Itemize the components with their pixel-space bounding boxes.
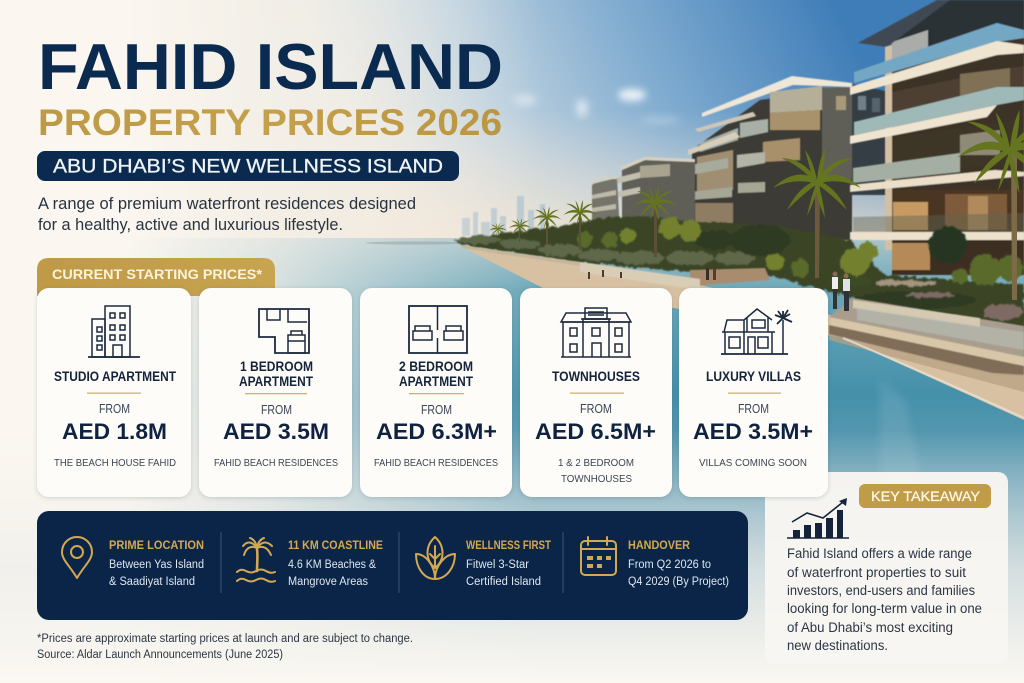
section tab: current starting prices (37, 258, 275, 296)
fact: wellness (466, 540, 551, 588)
icon: 2 bedroom floor plan (409, 306, 467, 353)
card heading (239, 359, 314, 389)
takeaway text: new destinations. (787, 638, 888, 653)
icon: palm and waves (237, 538, 275, 582)
fact: prime location: Between Yas Island (109, 559, 204, 571)
big building (850, 0, 1024, 275)
icon: villa with palm (721, 309, 792, 354)
far buildings (590, 157, 695, 232)
palm trees (489, 110, 1024, 300)
subtitle: PROPERTY PRICES 2026 (38, 102, 502, 143)
fact: coastline: 4.6 KM Beaches & (288, 559, 376, 571)
icon: wellness leaves (416, 537, 455, 579)
fact: handover: From Q2 2026 to (628, 559, 711, 571)
vegetation along promenade (455, 216, 1024, 328)
card: studio apartment (37, 288, 191, 497)
card: 1 bedroom apartment: FROM (261, 403, 292, 417)
badge (859, 484, 991, 508)
icon: 1 bedroom floor plan (259, 309, 309, 353)
card: luxury villas (679, 288, 828, 497)
intro text (38, 195, 416, 234)
footnote: Source: Aldar Launch Announcements (June 2025) (37, 649, 283, 661)
card heading: TOWNHOUSES (552, 369, 640, 384)
card heading (399, 359, 474, 389)
promenade, railing and sea wall (829, 298, 1024, 418)
card: townhouses (520, 288, 672, 497)
plaza and low wall (462, 245, 770, 290)
title: FAHID ISLAND (38, 31, 503, 103)
card: townhouses: FROM (580, 402, 612, 416)
fact: wellness: WELLNESS FIRST (466, 540, 551, 552)
card: studio apartment: THE BEACH HOUSE FAHID (54, 457, 176, 469)
footnote (37, 633, 413, 661)
fact: prime location: & Saadiyat Island (109, 576, 195, 588)
sand beach (460, 246, 1024, 420)
badge: KEY TAKEAWAY (871, 489, 980, 504)
price: AED 3.5M+ (693, 419, 813, 444)
card: 2 bedroom apartment: FROM (421, 403, 452, 417)
card heading: APARTMENT (399, 374, 474, 389)
fact: prime location (109, 540, 204, 588)
takeaway text: of Abu Dhabi’s most exciting (787, 620, 953, 635)
people walking (588, 268, 850, 311)
tagline pill: ABU DHABI’S NEW WELLNESS ISLAND (53, 156, 443, 178)
card: 2 bedroom apartment: FAHID BEACH RESIDENCES (374, 457, 498, 469)
card: 1 bedroom apartment (199, 288, 352, 497)
takeaway text: investors, end-users and families (787, 583, 975, 598)
card heading: LUXURY VILLAS (706, 369, 801, 384)
fact: prime location: PRIME LOCATION (109, 540, 204, 552)
fact: wellness: Certified Island (466, 576, 541, 588)
fact: handover: Q4 2029 (By Project) (628, 576, 729, 588)
intro text: A range of premium waterfront residences designed (38, 195, 416, 213)
card: luxury villas: VILLAS COMING SOON (699, 457, 807, 469)
card heading: APARTMENT (239, 374, 314, 389)
takeaway text: looking for long-term value in one (787, 601, 982, 616)
card: key takeaway (765, 472, 1008, 664)
takeaway text: Fahid Island offers a wide range (787, 546, 972, 561)
intro text: for a healthy, active and luxurious lifestyle. (38, 216, 343, 234)
fact: handover (628, 540, 729, 588)
card heading: 1 BEDROOM (240, 359, 313, 374)
icon: calendar (581, 537, 616, 575)
fact: wellness: Fitwel 3-Star (466, 559, 529, 571)
section tab: current starting prices: CURRENT STARTING PRICES* (52, 267, 263, 282)
icon: apartment building (88, 306, 140, 357)
takeaway text: of waterfront properties to suit (787, 565, 966, 580)
price: AED 3.5M (223, 419, 329, 444)
fact: coastline (288, 540, 383, 588)
fact: coastline: 11 KM COASTLINE (288, 540, 383, 552)
card heading: STUDIO APARTMENT (54, 369, 177, 384)
icon: rising bar chart (787, 498, 849, 538)
price: AED 6.3M+ (376, 419, 497, 444)
card: townhouses: TOWNHOUSES (561, 473, 632, 485)
card heading: 2 BEDROOM (399, 359, 473, 374)
middle building (688, 76, 890, 240)
price: AED 6.5M+ (535, 419, 656, 444)
fact: coastline: Mangrove Areas (288, 576, 368, 588)
card: studio apartment: FROM (99, 402, 130, 416)
icon: townhouse (561, 308, 631, 357)
card: townhouses: 1 & 2 BEDROOM (558, 457, 634, 469)
panel: key facts (37, 511, 748, 620)
card: luxury villas: FROM (738, 402, 769, 416)
takeaway text (787, 546, 982, 653)
footnote: *Prices are approximate starting prices at launch and are subject to change. (37, 633, 413, 645)
card: 1 bedroom apartment: FAHID BEACH RESIDENCES (214, 457, 338, 469)
card: 2 bedroom apartment (360, 288, 512, 497)
tagline pill (37, 151, 459, 181)
icon: location pin (62, 537, 92, 578)
price: AED 1.8M (62, 419, 167, 444)
fact: handover: HANDOVER (628, 540, 691, 552)
